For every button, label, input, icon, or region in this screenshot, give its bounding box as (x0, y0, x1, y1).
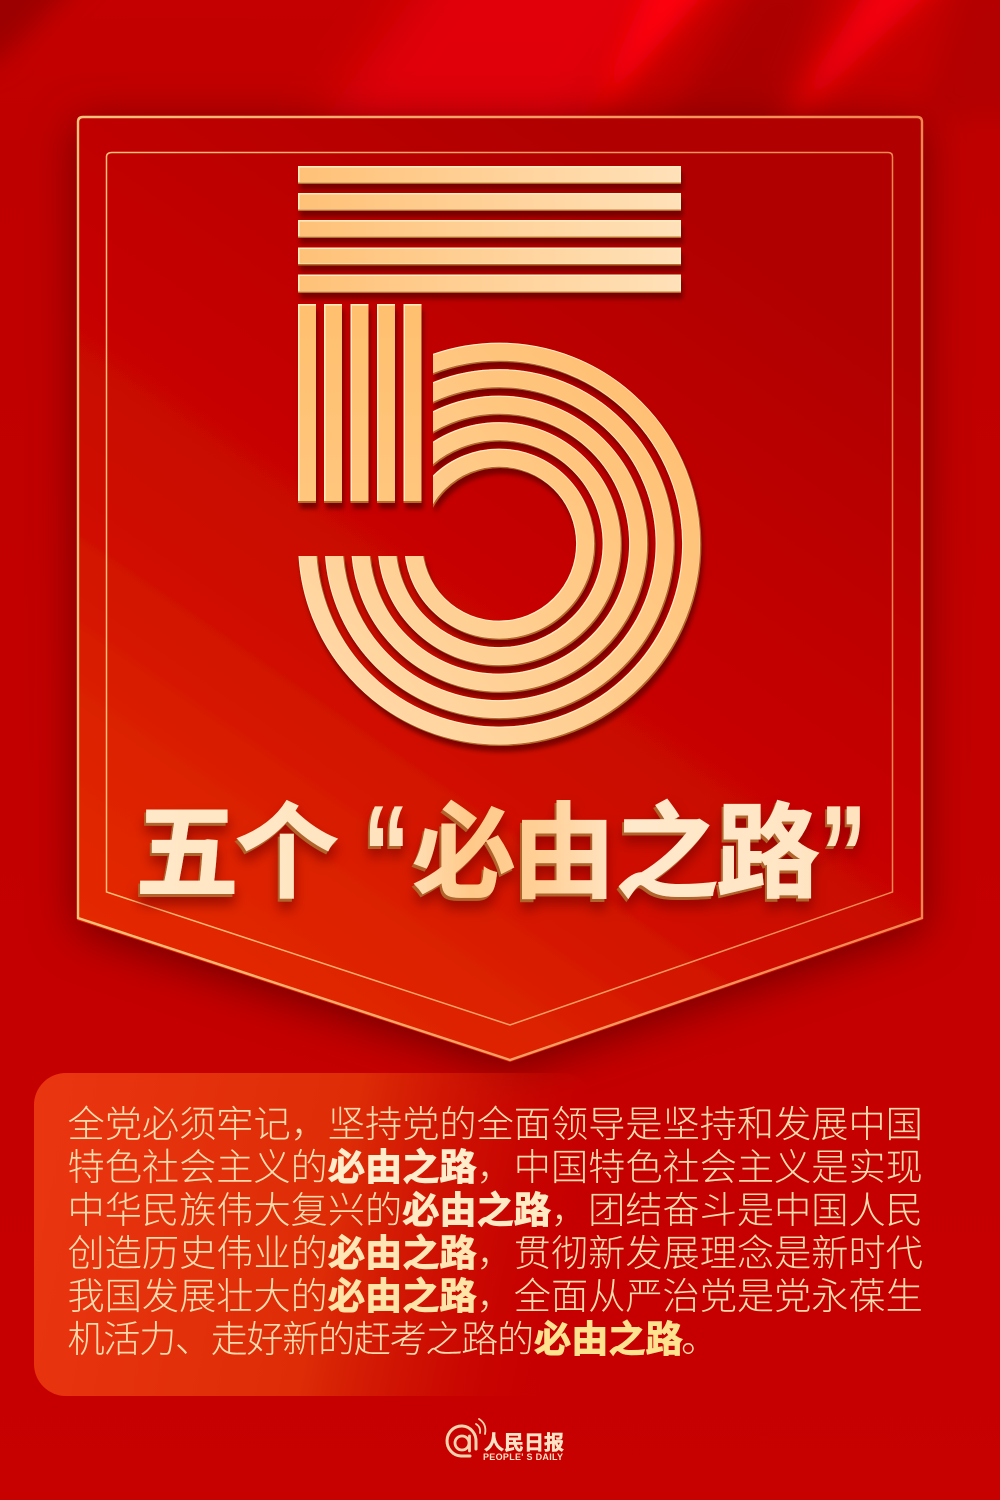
top horizontal stripes (298, 166, 681, 293)
title: 必由之路 (412, 796, 820, 912)
line 6: 机活力、走好新的赶考之路的 (68, 1318, 533, 1360)
line 6: 。 (681, 1318, 718, 1360)
line 1: 全党必须牢记，坚持党的全面领导是坚持和发展中国 (68, 1103, 923, 1145)
title (135, 777, 867, 934)
title: “ (363, 777, 410, 934)
body paragraph (68, 1103, 923, 1360)
logo name: 人民日报 (484, 1432, 564, 1454)
concentric rings (307, 352, 692, 737)
shield banner (77, 116, 923, 1062)
line 5: 我国发展壮大的必由之路，全面从严治党是党永葆生 (68, 1275, 923, 1317)
title: 五个 (135, 796, 339, 912)
logo: People's Daily (447, 1419, 564, 1462)
logo English name: PEOPLE' S DAILY (483, 1452, 563, 1462)
line 2: 特色社会主义的必由之路，中国特色社会主义是实现 (68, 1146, 923, 1188)
line 4: 创造历史伟业的必由之路，贯彻新发展理念是新时代 (68, 1232, 923, 1274)
title: ” (820, 777, 867, 934)
text panel background (34, 1073, 594, 1396)
vertical stripes (298, 304, 422, 503)
icon: at sign with signal arcs (447, 1419, 485, 1456)
big numeral 5 made of gold stripes (298, 166, 692, 737)
line 3: 中华民族伟大复兴的必由之路，团结奋斗是中国人民 (68, 1189, 923, 1231)
line 6: 必由之路 (534, 1318, 683, 1360)
